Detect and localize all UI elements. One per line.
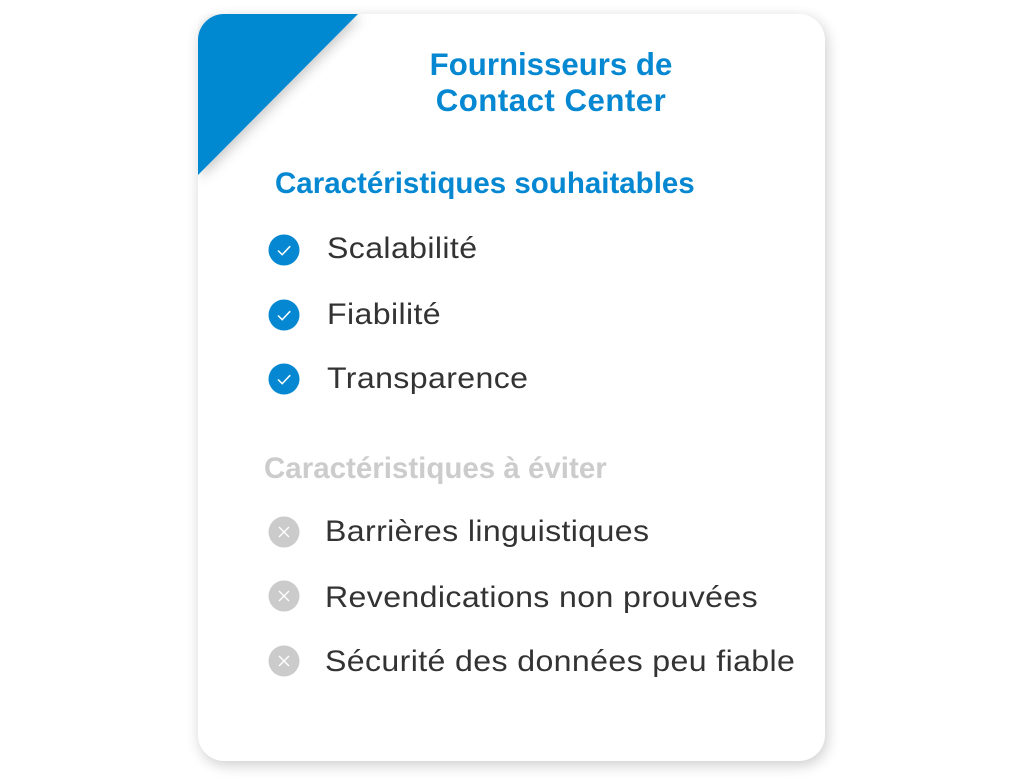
heading: characteristics to avoid: Caractéristiques à éviter — [264, 452, 607, 485]
text: Barrières linguistiques: Barrières linguistiques — [325, 515, 649, 548]
heading: desirable characteristics: Caractéristiques souhaitables — [275, 167, 695, 200]
text: Scalabilité: Scalabilité — [327, 232, 477, 265]
list: to avoid — [268, 515, 795, 678]
title — [430, 47, 672, 118]
icon: cross — [268, 646, 300, 676]
icon: cross — [268, 516, 300, 548]
text: Fiabilité: Fiabilité — [327, 298, 441, 331]
list: desirable — [268, 232, 528, 395]
icon: check — [268, 364, 300, 394]
text: Revendications non prouvées: Revendications non prouvées — [325, 581, 758, 614]
text: Sécurité des données peu fiable: Sécurité des données peu fiable — [325, 645, 795, 678]
icon: check — [268, 234, 300, 266]
title: Contact Center — [436, 83, 666, 118]
title: Fournisseurs de — [430, 47, 672, 82]
text: Transparence: Transparence — [327, 362, 528, 395]
icon: check — [268, 300, 300, 330]
panel: card — [194, 12, 834, 772]
icon: cross — [268, 580, 300, 612]
corner triangle — [198, 14, 360, 178]
